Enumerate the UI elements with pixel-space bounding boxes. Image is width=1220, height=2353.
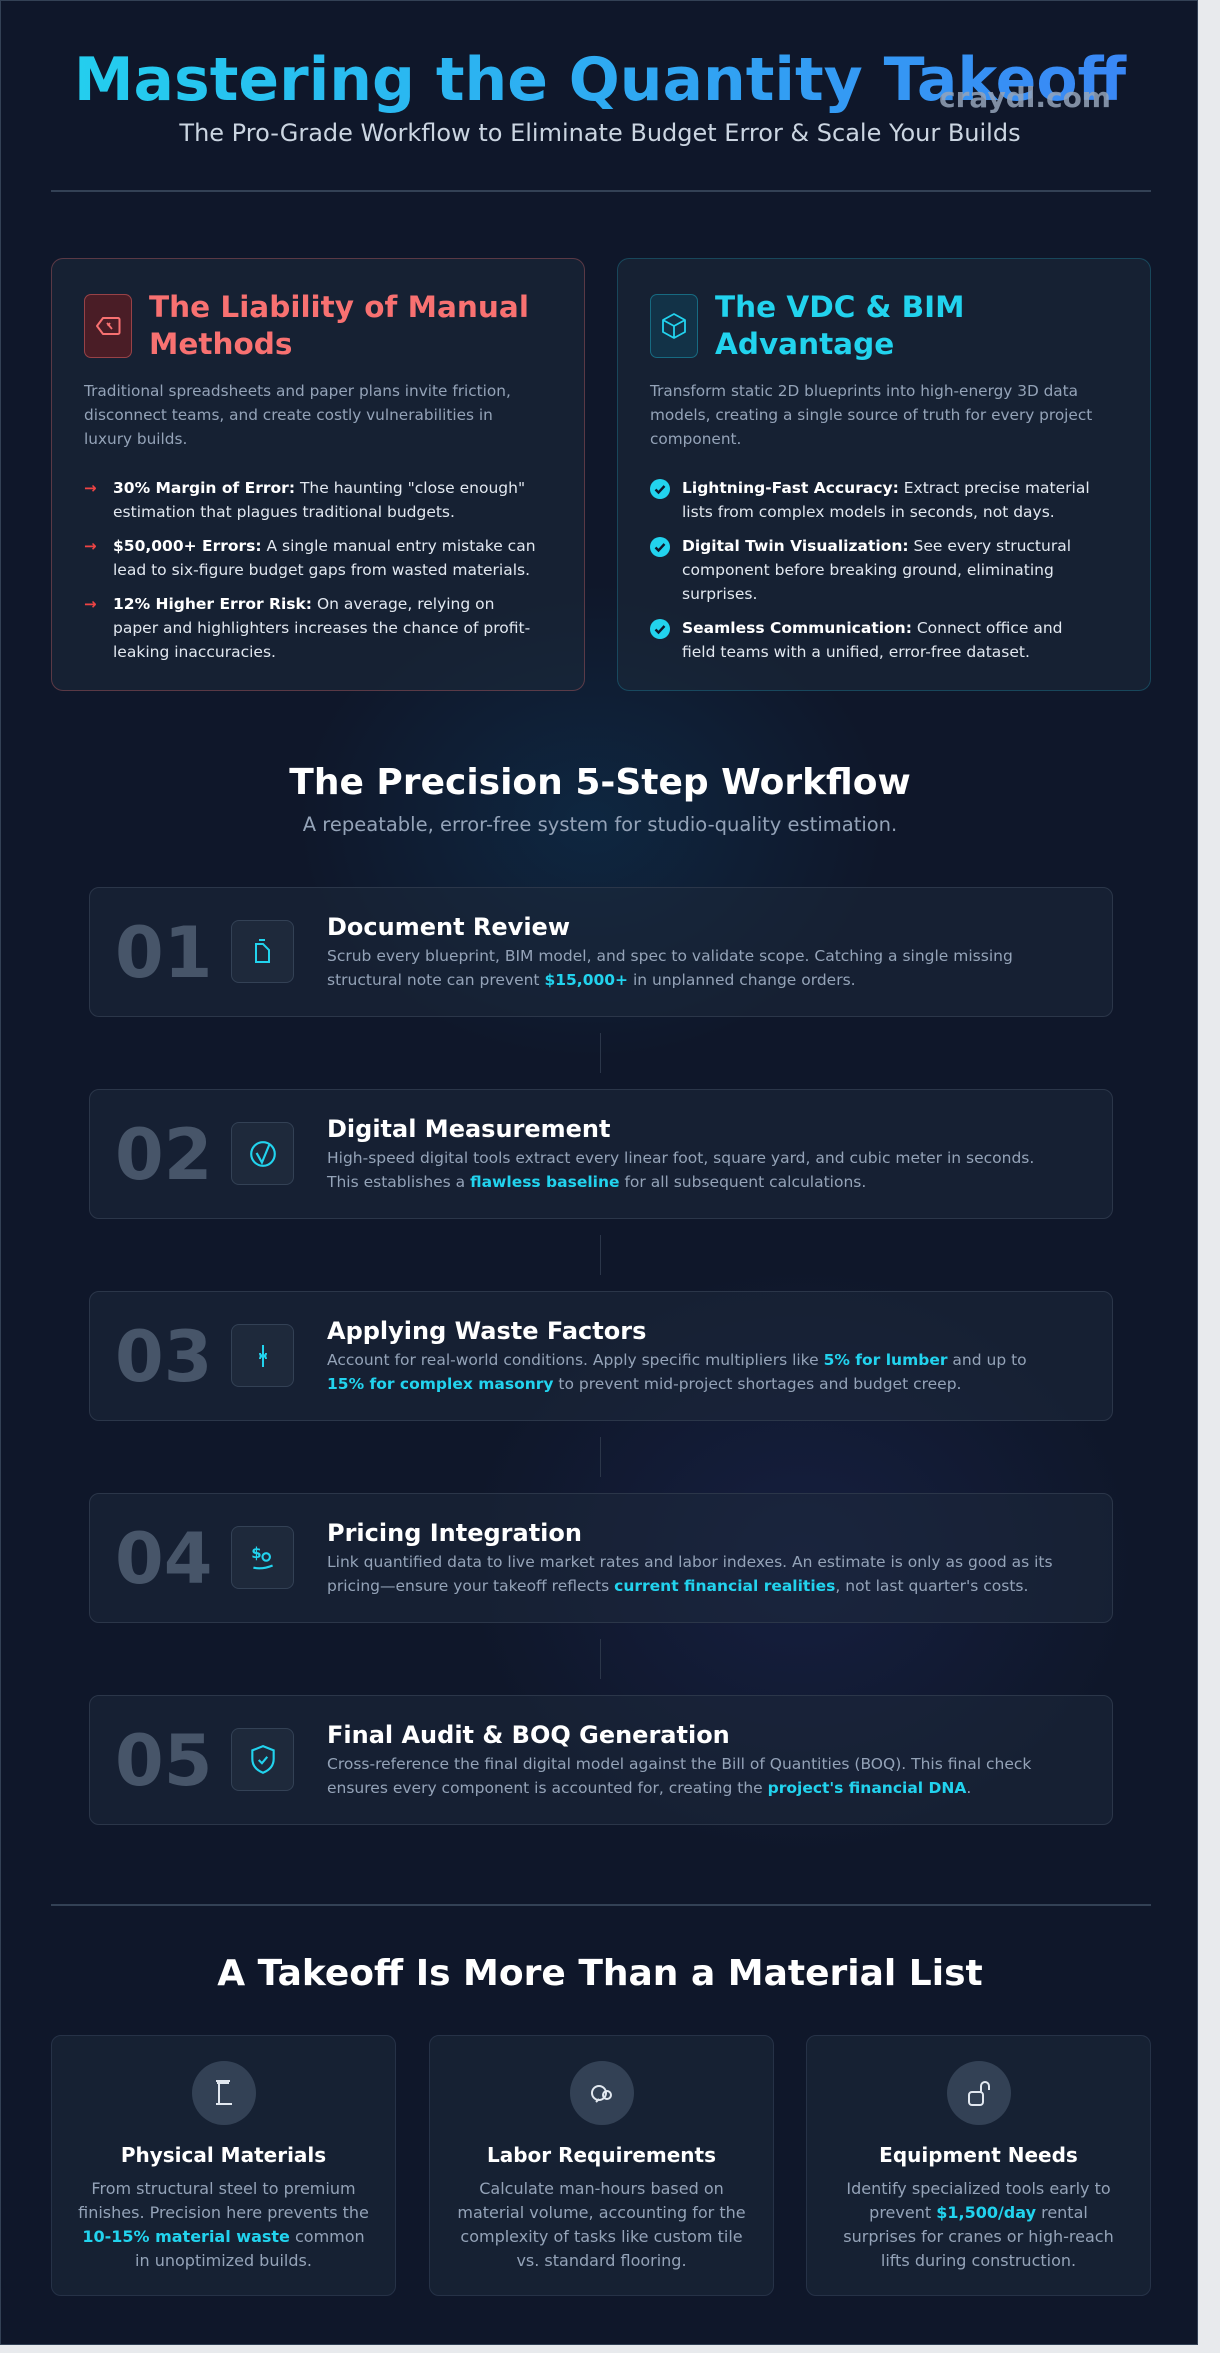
- icon: cube: [650, 294, 698, 358]
- card: physical materials: Physical Materials: [121, 2143, 326, 2167]
- step 02: Digital Measurement: [327, 1115, 610, 1143]
- list: manual risks: 30% Margin of Error: The haunting "close enough" estimation that plagues traditional budgets.: [113, 479, 525, 521]
- panel: manual methods: [51, 258, 585, 691]
- step 05: 05: [115, 1720, 212, 1802]
- step 01: Scrub every blueprint, BIM model, and spec to validate scope. Catching a single missing structural note can prevent $15,000+ in unplanned change orders.: [327, 947, 1013, 989]
- list: manual risks: 12% Higher Error Risk: On average, relying on paper and highlighters increases the chance of profit-leaking inaccuracies.: [113, 595, 530, 661]
- icon: pricing: $: [251, 1543, 261, 1561]
- icon: eraser tag: [84, 294, 132, 358]
- step 04: Pricing Integration: [327, 1519, 582, 1547]
- step 03: Applying Waste Factors: [327, 1317, 646, 1345]
- card: labor: [429, 2035, 774, 2296]
- step 05: [89, 1695, 1113, 1825]
- step 03: 03: [115, 1316, 212, 1398]
- card: labor: Calculate man-hours based on material volume, accounting for the complexity of tasks like custom tile vs. standard flooring.: [457, 2179, 746, 2270]
- step 01: [89, 887, 1113, 1017]
- heading: manual: The Liability of Manual Methods: [149, 290, 529, 361]
- step 02: [89, 1089, 1113, 1219]
- list: manual risks: $50,000+ Errors: A single manual entry mistake can lead to six-figure budget gaps from wasted materials.: [113, 537, 536, 579]
- icon: measure check: [231, 1122, 294, 1185]
- list: VDC benefits: Lightning-Fast Accuracy: Extract precise material lists from complex models in seconds, not days.: [682, 479, 1090, 521]
- panel: VDC & BIM: [617, 258, 1151, 691]
- list: VDC benefits: [650, 479, 1090, 661]
- icon: beam: [192, 2061, 256, 2125]
- step 04: [89, 1493, 1113, 1623]
- title: Mastering the Quantity Takeoff: [74, 45, 1126, 115]
- step 04: 04: [115, 1518, 212, 1600]
- heading: more than material list: A Takeoff Is More Than a Material List: [217, 1953, 983, 1994]
- card: physical materials: From structural steel to premium finishes. Precision here prevents the 10-15% material waste common in unoptimized builds.: [78, 2179, 369, 2270]
- card: physical materials: [51, 2035, 396, 2296]
- list: manual risks: →: [84, 595, 97, 613]
- heading: workflow: The Precision 5-Step Workflow: [289, 762, 911, 803]
- step 03: Account for real-world conditions. Apply specific multipliers like 5% for lumber and up to 15% for complex masonry to prevent mid-project shortages and budget creep.: [327, 1351, 1027, 1393]
- icon: document: [231, 920, 294, 983]
- step 05: Cross-reference the final digital model against the Bill of Quantities (BOQ). This final check ensures every component is accounted for, creating the project's financial DNA.: [327, 1755, 1031, 1797]
- icon: pricing: [231, 1526, 294, 1589]
- card: equipment: [806, 2035, 1151, 2296]
- text: VDC description: Transform static 2D blueprints into high-energy 3D data models, creating a single source of truth for every project component.: [650, 382, 1092, 448]
- step 01: 01: [115, 912, 212, 994]
- list: manual risks: →: [84, 479, 97, 497]
- step 03: [89, 1291, 1113, 1421]
- step 01: Document Review: [327, 913, 570, 941]
- text: manual description: Traditional spreadsheets and paper plans invite friction, disconnect teams, and create costly vulnerabilities in luxury builds.: [84, 382, 511, 448]
- subheading: workflow: A repeatable, error-free system for studio-quality estimation.: [303, 813, 897, 836]
- card: labor: Labor Requirements: [487, 2143, 716, 2167]
- icon: factor: [231, 1324, 294, 1387]
- step 02: 02: [115, 1114, 212, 1196]
- icon: unlocked padlock: [946, 2061, 1010, 2125]
- subtitle: The Pro-Grade Workflow to Eliminate Budget Error & Scale Your Builds: [179, 119, 1021, 147]
- step 04: Link quantified data to live market rates and labor indexes. An estimate is only as good as its pricing—ensure your takeoff reflects current financial realities, not last quarter's costs.: [327, 1553, 1053, 1595]
- icon: labor: [570, 2061, 634, 2125]
- step 05: Final Audit & BOQ Generation: [327, 1721, 730, 1749]
- heading: VDC: The VDC & BIM Advantage: [715, 290, 964, 361]
- list: manual risks: →: [84, 537, 97, 555]
- list: VDC benefits: Seamless Communication: Connect office and field teams with a unified, error-free dataset.: [682, 619, 1062, 661]
- watermark: craydl.com: [939, 81, 1111, 114]
- step 02: High-speed digital tools extract every linear foot, square yard, and cubic meter in seconds. This establishes a flawless baseline for all subsequent calculations.: [327, 1149, 1034, 1191]
- card: equipment: Identify specialized tools early to prevent $1,500/day rental surprises for cranes or high-reach lifts during construction.: [843, 2179, 1114, 2270]
- icon: shield: [231, 1728, 294, 1791]
- list: manual risks: [84, 479, 536, 661]
- list: VDC benefits: Digital Twin Visualization: See every structural component before breaking ground, eliminating surprises.: [682, 537, 1071, 603]
- card: equipment: Equipment Needs: [879, 2143, 1078, 2167]
